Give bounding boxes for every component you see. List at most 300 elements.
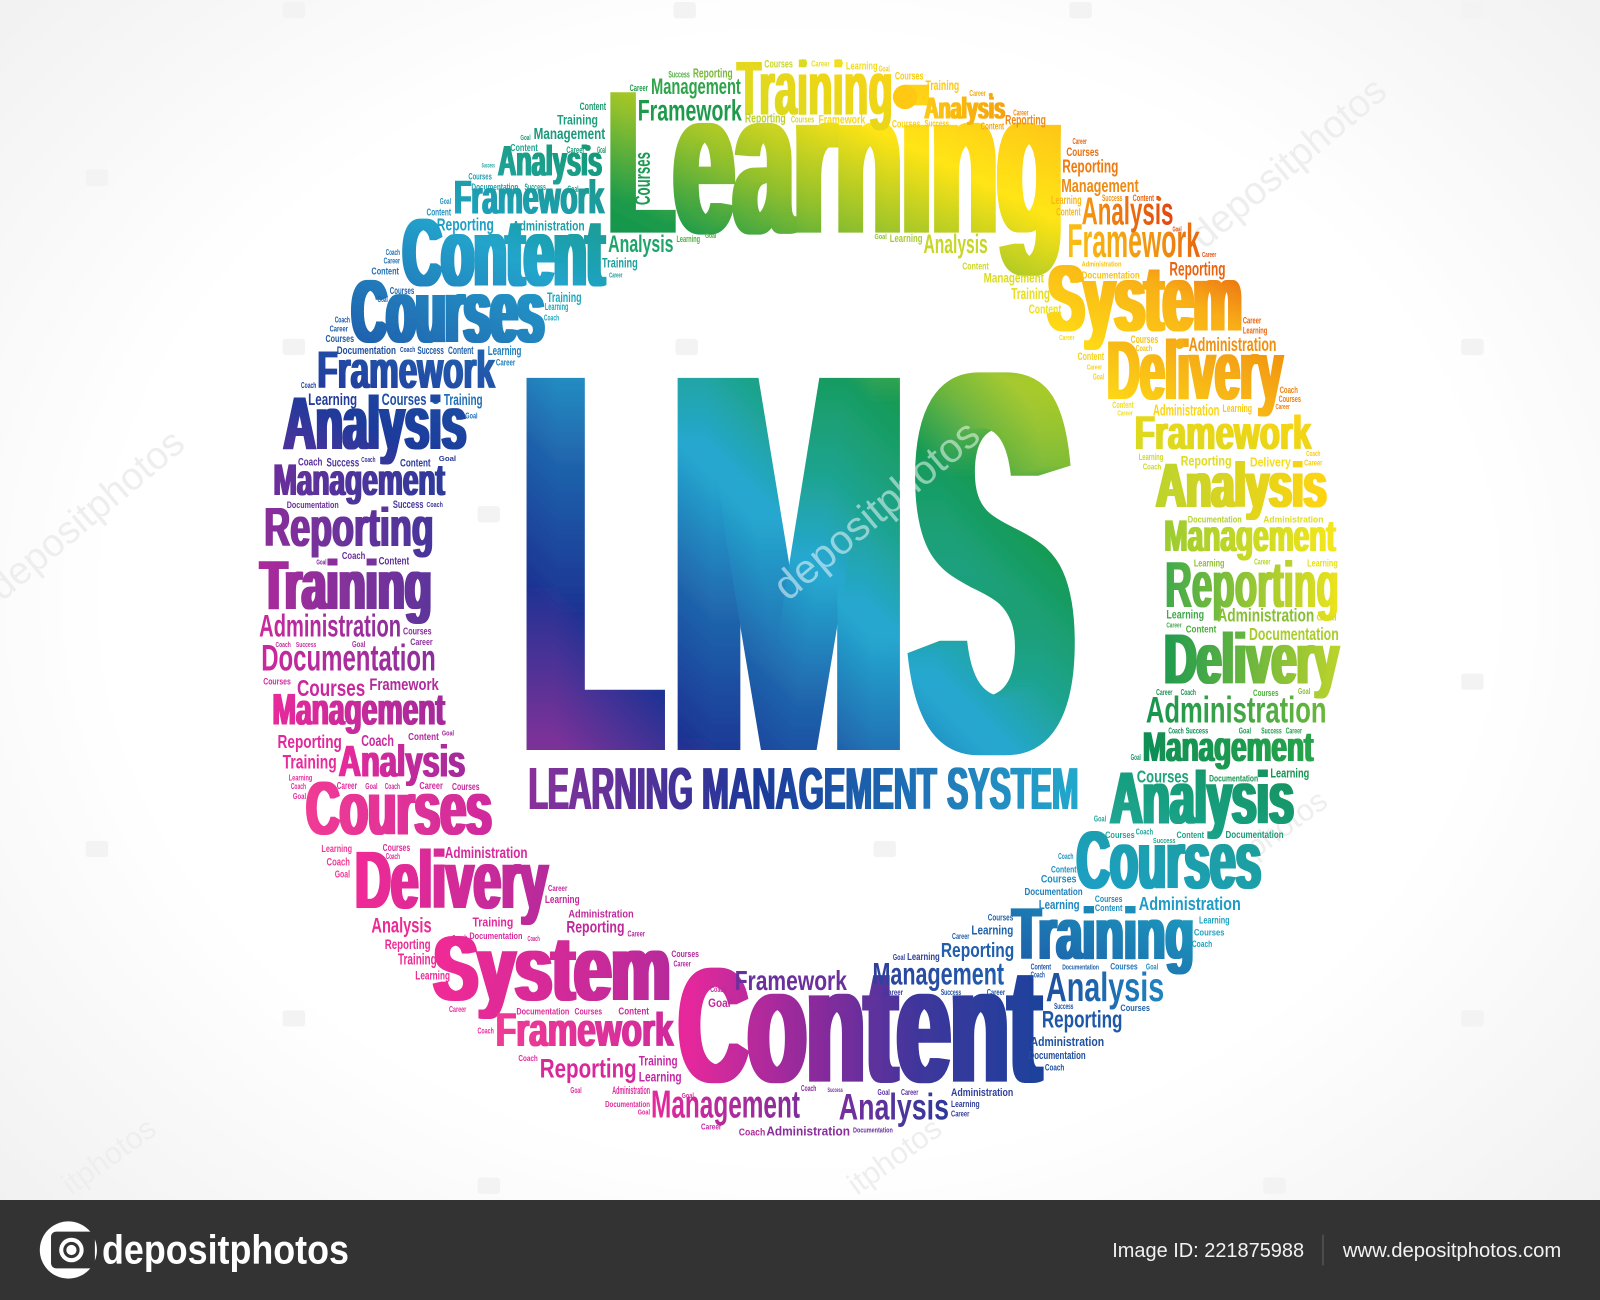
small words: right arc: Documentation bbox=[1209, 774, 1258, 784]
small words: left and lower left arc: Documentation bbox=[516, 1006, 570, 1016]
small words: right arc: Goal bbox=[1316, 612, 1337, 622]
small words: right arc: Management bbox=[1061, 175, 1139, 196]
small words: upper left arc: Goal bbox=[520, 134, 531, 142]
logo wordmark: depositphotos bbox=[102, 1226, 349, 1272]
small words: right arc: Administration bbox=[1139, 893, 1241, 914]
small words: right arc: Success bbox=[1153, 837, 1176, 845]
small words: left and lower left arc: Courses bbox=[403, 627, 432, 638]
small words: bottom arc: Success bbox=[828, 1087, 843, 1094]
small words: right arc: Documentation bbox=[1024, 887, 1083, 898]
small words: bottom arc: Goal bbox=[682, 1092, 694, 1100]
word: Analysis bottom: Analysis bbox=[839, 1086, 949, 1127]
small words: upper left arc: Career bbox=[330, 325, 349, 334]
small words: upper left arc: Training bbox=[557, 112, 598, 128]
small words: right arc: Career bbox=[1254, 557, 1271, 566]
center watermark: depositphotos bbox=[764, 410, 988, 609]
small words: left and lower left arc: Reporting bbox=[385, 937, 431, 953]
small words: top arc: Career bbox=[630, 83, 648, 93]
small words: right arc: Documentation bbox=[1082, 271, 1140, 282]
small words: left and lower left arc: Learning bbox=[639, 1070, 682, 1086]
word: Analysis right lower: Analysis bbox=[1110, 756, 1294, 839]
small words: left and lower left arc: Coach bbox=[386, 852, 400, 861]
word: Analysis upper right: Analysis bbox=[1082, 190, 1173, 233]
small words: bottom arc: Career bbox=[987, 988, 1006, 997]
small words: top arc: Goal bbox=[879, 64, 890, 73]
small words: upper left arc: Coach bbox=[544, 313, 559, 322]
small words: upper left arc: Goal bbox=[705, 232, 716, 240]
small words: bottom arc: Career bbox=[952, 932, 970, 941]
word: Training top: Training bbox=[737, 46, 893, 131]
small words: left and lower left arc: Goal bbox=[316, 558, 327, 566]
word: Documentation left: Documentation bbox=[261, 637, 436, 678]
small words: top arc bbox=[630, 58, 1046, 133]
small words: right arc: Learning bbox=[1051, 193, 1082, 207]
small words: bottom arc: Career bbox=[701, 1123, 722, 1132]
small words: right arc: Analysis bbox=[923, 229, 988, 259]
small words: top arc: Career bbox=[969, 89, 986, 98]
small words: upper left arc: Coach bbox=[386, 248, 400, 257]
small words: bottom arc: Coach bbox=[710, 985, 727, 994]
small words: right arc: Coach bbox=[1136, 344, 1152, 353]
small words: right arc: Learning bbox=[1199, 915, 1230, 926]
small words: upper left arc: Success bbox=[482, 162, 495, 169]
small words: upper left arc: Career bbox=[496, 357, 516, 367]
small words: right arc: Learning bbox=[1243, 326, 1267, 336]
word: Content bottom: Content bbox=[679, 934, 1041, 1117]
small words: bottom arc: Career bbox=[951, 1109, 970, 1118]
small words: left and lower left arc: Courses bbox=[263, 677, 291, 687]
small words: left and lower left arc: Coach bbox=[361, 733, 394, 750]
small words: right arc: Content bbox=[1051, 864, 1077, 874]
word: Analysis upper left: Analysis bbox=[498, 138, 602, 186]
small words: left and lower left arc: Career bbox=[337, 781, 357, 792]
small words: right arc: Content bbox=[1133, 193, 1154, 203]
small words: right arc: Coach bbox=[1181, 688, 1196, 697]
small words: right arc: Success bbox=[1261, 727, 1282, 736]
text: S bbox=[914, 260, 1070, 865]
word: Content upper left: Content bbox=[403, 200, 604, 307]
word: Delivery right lower: Delivery bbox=[1164, 620, 1339, 700]
website url: www.depositphotos.com bbox=[1342, 1240, 1561, 1262]
small words: upper left arc: Coach bbox=[400, 346, 415, 354]
small words: left and lower left arc: Coach bbox=[291, 782, 306, 791]
small words: bottom arc: Documentation bbox=[853, 1127, 893, 1135]
small words: right arc: Learning bbox=[1222, 403, 1252, 415]
small words: left and lower left arc: Analysis bbox=[371, 914, 432, 938]
word: Analysis lower left: Analysis bbox=[339, 736, 465, 787]
small words: upper left arc: Documentation bbox=[471, 182, 519, 192]
small words: left and lower left arc: Goal bbox=[365, 782, 378, 791]
word: System upper right: System bbox=[1048, 246, 1242, 351]
small words: left and lower left arc: Training bbox=[472, 915, 513, 930]
small words: right arc: Learning bbox=[890, 233, 923, 245]
small words: right arc: Career bbox=[1156, 688, 1173, 697]
small words: upper left arc: Coach bbox=[335, 315, 350, 324]
small words: right arc: Career bbox=[1166, 622, 1182, 630]
small words: top arc: Courses bbox=[892, 119, 920, 131]
small words: left and lower left arc: Goal bbox=[335, 870, 350, 881]
subtitle: Learning Management System bbox=[529, 755, 1079, 822]
small words: right arc: Courses bbox=[1095, 894, 1122, 904]
logo icon: camera bbox=[40, 1221, 97, 1279]
small words: upper left arc: Career bbox=[384, 256, 401, 265]
small words: left and lower left arc: Coach bbox=[528, 935, 540, 943]
small words: bottom arc: Courses bbox=[1120, 1003, 1150, 1013]
small words: left and lower left arc: Content bbox=[618, 1006, 649, 1017]
word cloud ring bbox=[259, 46, 1339, 1139]
small words: bottom arc: Reporting bbox=[941, 940, 1014, 962]
word: Courses lower left: Courses bbox=[306, 768, 492, 852]
small words: left and lower left arc: Content bbox=[400, 457, 431, 469]
small words: bottom arc: Goal bbox=[638, 1108, 650, 1116]
small words: right arc: Administration bbox=[1263, 514, 1324, 524]
small words: top arc: Reporting bbox=[745, 110, 786, 125]
word: Analysis lower right: Analysis bbox=[1046, 964, 1164, 1010]
small words: left and lower left arc: Career bbox=[628, 930, 645, 939]
small words: right arc: Learning bbox=[1039, 897, 1080, 912]
small words: top arc: Courses bbox=[764, 58, 793, 70]
small words: left and lower left arc: Documentation bbox=[287, 500, 339, 510]
small words: left and lower left arc: Coach bbox=[276, 641, 291, 649]
small words: bottom arc: Coach bbox=[739, 1128, 765, 1139]
small words: bottom arc: Goal bbox=[570, 1086, 582, 1095]
small words: upper left arc: Goal bbox=[440, 197, 451, 206]
small words: right arc: Goal bbox=[1172, 226, 1182, 234]
small words: right arc: Administration bbox=[1217, 604, 1314, 625]
small words: upper left arc: Analysis bbox=[608, 231, 673, 258]
small words: right arc: Courses bbox=[1041, 874, 1077, 886]
small words: right arc: Content bbox=[1029, 301, 1062, 316]
small words: right arc: Content bbox=[1186, 625, 1217, 636]
small words: bottom arc: Coach bbox=[801, 1084, 816, 1093]
small words: upper left arc: Courses bbox=[390, 286, 414, 297]
image id: Image ID: 221875988 bbox=[1112, 1240, 1304, 1262]
small words: right arc: Career bbox=[1202, 251, 1216, 259]
word: Management left: Management bbox=[273, 454, 445, 505]
small words: left and lower left arc: Courses bbox=[671, 949, 699, 959]
word: Management right: Management bbox=[1164, 510, 1336, 561]
small words: right arc: Career bbox=[1276, 403, 1290, 411]
small words: right arc bbox=[874, 137, 1339, 949]
small words: left and lower left arc: Courses bbox=[297, 675, 365, 701]
small words: upper left arc bbox=[301, 101, 716, 420]
small words: right arc: Goal bbox=[1094, 814, 1106, 823]
small words: right arc: Content bbox=[962, 261, 989, 272]
small words: bottom arc: Goal bbox=[878, 1088, 890, 1097]
small words: upper left arc: Administration bbox=[512, 219, 585, 235]
watermarks: itphotos bbox=[841, 1111, 948, 1202]
small words: right arc: Coach bbox=[1168, 727, 1184, 736]
small words: right arc: Goal bbox=[1131, 753, 1141, 762]
central LMS wordmark bbox=[526, 260, 1070, 865]
small words: left and lower left arc: Courses bbox=[383, 843, 410, 854]
central LMS wordmark: L bbox=[526, 260, 658, 865]
small words: right arc: Coach bbox=[1192, 939, 1213, 949]
small words: right arc: Career bbox=[1087, 363, 1102, 371]
small words: left and lower left arc: Success bbox=[327, 455, 359, 469]
small words: right arc: Documentation bbox=[1226, 830, 1284, 841]
small words: upper left arc: Learning bbox=[308, 391, 357, 409]
small words: right arc: Content bbox=[1112, 400, 1134, 410]
footer bar bbox=[0, 1200, 1600, 1300]
small words: left and lower left arc: Coach bbox=[478, 1027, 494, 1036]
small words: bottom arc: Goal bbox=[893, 953, 905, 962]
word: Analysis left: Analysis bbox=[284, 382, 466, 466]
small words: top arc: Framework bbox=[818, 112, 865, 126]
small words: top arc: Career bbox=[811, 59, 830, 68]
small words: upper left arc: Goal bbox=[465, 411, 478, 420]
small words: left and lower left arc: Success bbox=[393, 499, 423, 511]
small words: left and lower left arc: Coach bbox=[452, 934, 467, 942]
word: Delivery right: Delivery bbox=[1107, 323, 1283, 417]
word: Courses right lower: Courses bbox=[1077, 815, 1261, 906]
small words: left and lower left arc: Coach bbox=[361, 456, 376, 464]
small words: upper left arc: Content bbox=[448, 345, 474, 357]
word: Framework upper right: Framework bbox=[1067, 215, 1200, 267]
small words: upper left arc: Courses bbox=[326, 334, 354, 345]
word: Framework bottom left: Framework bbox=[496, 1004, 674, 1056]
small words: right arc: Goal bbox=[1239, 727, 1251, 736]
word: Delivery lower left: Delivery bbox=[355, 835, 548, 926]
small words: bottom arc: Courses bbox=[988, 912, 1013, 922]
small words: right arc: Content bbox=[1056, 206, 1081, 218]
small words: bottom arc: Career bbox=[884, 988, 904, 997]
small words: right arc: Learning bbox=[1307, 558, 1338, 569]
small words: bottom arc: Learning bbox=[971, 923, 1013, 938]
small words: bottom arc: Coach bbox=[1045, 1062, 1065, 1072]
letter M: M bbox=[672, 260, 905, 865]
small words: bottom arc: Goal bbox=[1146, 962, 1158, 971]
small words: right arc: Learning bbox=[1270, 766, 1309, 781]
small words: upper left arc: Learning bbox=[677, 234, 700, 244]
small words: right arc: Courses bbox=[1066, 145, 1099, 159]
small words: right arc: Courses bbox=[1279, 394, 1301, 404]
small words: right arc: Courses bbox=[1137, 767, 1189, 787]
small words: right arc: Courses bbox=[1131, 334, 1158, 346]
small words: upper left arc: Training bbox=[444, 392, 483, 409]
small words: left and lower left arc: Goal bbox=[352, 640, 365, 649]
small words: left and lower left arc: Success bbox=[296, 641, 316, 649]
small words: upper left arc: Training bbox=[547, 290, 582, 306]
small words: right arc: Success bbox=[1102, 193, 1122, 203]
word: Training lower right: Training bbox=[1012, 892, 1194, 975]
word: Learning: Learning bbox=[608, 49, 1063, 277]
small words: bottom arc: Documentation bbox=[1062, 963, 1099, 971]
small words: left and lower left arc: Content bbox=[408, 732, 439, 743]
small words: left and lower left arc: Courses bbox=[574, 1006, 602, 1016]
watermarks: photos bbox=[1239, 783, 1334, 865]
small words: upper left arc: Content bbox=[427, 207, 451, 218]
small words: upper left arc: Goal bbox=[597, 145, 606, 155]
small words: right arc: Goal bbox=[1298, 687, 1310, 696]
small words: bottom arc: Administration bbox=[612, 1085, 650, 1097]
small words: left and lower left arc: Learning bbox=[321, 844, 352, 855]
word: Framework left: Framework bbox=[317, 341, 495, 400]
small words: bottom arc: Documentation bbox=[605, 1100, 650, 1109]
small words: upper left arc: Courses bbox=[468, 172, 492, 182]
small words: right arc: Management bbox=[984, 271, 1044, 287]
small words: top arc: Learning bbox=[846, 60, 878, 72]
small words: right arc: Coach bbox=[1136, 828, 1153, 837]
small words: right arc: Success bbox=[1186, 727, 1208, 736]
small words: top arc: Career bbox=[1013, 108, 1029, 117]
small words: upper left arc: Learning bbox=[488, 343, 521, 358]
small words: right arc: Courses bbox=[1253, 688, 1279, 698]
small words: left and lower left arc: Coach bbox=[298, 456, 323, 468]
word: Reporting right: Reporting bbox=[1165, 548, 1339, 621]
small words: right arc: Reporting bbox=[1181, 453, 1232, 469]
small words: right arc: Career bbox=[1243, 315, 1261, 325]
small words: bottom arc: Administration bbox=[1031, 1034, 1104, 1049]
watermarks: depositphotos bbox=[1182, 69, 1395, 257]
small words: upper left arc: Content bbox=[371, 266, 399, 277]
small words: top arc: Training bbox=[926, 78, 959, 94]
small words: bottom arc: Administration bbox=[766, 1124, 850, 1139]
small words: right arc: Career bbox=[1304, 458, 1323, 467]
small words: left and lower left arc: Reporting bbox=[540, 1054, 637, 1084]
small words: left and lower left arc: Coach bbox=[385, 782, 400, 791]
small words: right arc: Career bbox=[1059, 334, 1075, 342]
small words: right arc: Goal bbox=[1093, 373, 1104, 382]
small words: right arc: Coach bbox=[1058, 852, 1073, 861]
small words: right arc: Reporting bbox=[1062, 155, 1118, 176]
subtitle: Learning Management System: SYSTEM bbox=[947, 755, 1079, 822]
small words: upper left arc: Career bbox=[609, 272, 623, 280]
small words: right arc: Courses bbox=[1194, 928, 1224, 938]
watermarks: itphotos bbox=[56, 1111, 162, 1202]
small words: upper left arc: Goal bbox=[378, 295, 388, 304]
small words: bottom arc: Learning bbox=[951, 1099, 980, 1109]
word: Courses vertical: Courses bbox=[630, 152, 655, 205]
word: Courses upper left: Courses bbox=[352, 262, 544, 361]
small words: upper left arc: Learning bbox=[545, 302, 568, 313]
word: Analysis right: Analysis bbox=[1156, 451, 1327, 521]
word: Reporting left: Reporting bbox=[264, 496, 434, 558]
small words: left and lower left arc: Documentation bbox=[469, 931, 523, 941]
small words: bottom arc: Career bbox=[901, 1088, 919, 1097]
small words: upper left arc: Success bbox=[417, 345, 444, 357]
small words: bottom arc: Coach bbox=[1031, 971, 1045, 980]
small words: upper left arc: Reporting bbox=[437, 215, 494, 235]
small words: bottom arc: Content bbox=[1031, 962, 1051, 971]
small words: left and lower left arc: Training bbox=[639, 1053, 678, 1069]
small words: right arc: Administration bbox=[1189, 334, 1277, 356]
small words: left and lower left arc: Career bbox=[673, 959, 691, 968]
small words: top arc: Courses bbox=[791, 114, 814, 124]
small words: left and lower left arc: Coach bbox=[327, 856, 350, 868]
word: Reporting lower right: Reporting bbox=[1042, 1007, 1122, 1034]
small words: bottom arc: Goal bbox=[708, 996, 731, 1010]
small words: left and lower left arc: Training bbox=[398, 951, 437, 968]
small words: top arc: Courses bbox=[895, 71, 923, 83]
small words: right arc: Content bbox=[1095, 903, 1122, 913]
small words: right arc: Career bbox=[1117, 409, 1133, 417]
small words: right arc: Content bbox=[1177, 830, 1204, 840]
word: Administration left: Administration bbox=[259, 608, 401, 644]
small words: left and lower left arc: Training bbox=[283, 751, 337, 773]
small words: left and lower left arc: Courses bbox=[452, 782, 480, 793]
word: Administration right: Administration bbox=[1146, 689, 1327, 730]
small words: left and lower left arc: Coach bbox=[342, 551, 365, 562]
small words: right arc: Coach bbox=[1280, 385, 1298, 395]
small words: upper left arc: Goal bbox=[567, 184, 579, 194]
small words: right arc: Coach bbox=[1306, 450, 1320, 458]
word: Analysis top right: Analysis bbox=[924, 91, 1005, 125]
small words: upper left arc: Courses bbox=[382, 391, 427, 409]
small words: upper left arc: Content bbox=[580, 101, 606, 113]
small words: upper left arc: Success bbox=[524, 182, 546, 192]
small words: top arc: Success bbox=[924, 119, 949, 129]
small words: left and lower left arc: Reporting bbox=[566, 919, 624, 937]
small words: right arc: Courses bbox=[1105, 830, 1135, 840]
word: Framework top: Framework bbox=[638, 94, 742, 127]
small words: left and lower left arc: Goal bbox=[439, 455, 456, 463]
small words: right arc: Learning bbox=[1194, 558, 1224, 569]
small words: left and lower left arc: Administration bbox=[445, 845, 528, 862]
small words: top arc: Success bbox=[668, 70, 690, 80]
small words: left and lower left arc: Coach bbox=[427, 501, 443, 509]
small words: upper left arc: Training bbox=[602, 255, 638, 271]
word: Management lower left: Management bbox=[272, 683, 445, 734]
small words: left and lower left arc: Content bbox=[379, 555, 409, 567]
small words: left and lower left arc: Framework bbox=[369, 676, 440, 694]
small words: right arc: Content bbox=[1078, 351, 1104, 363]
small words: left and lower left arc: Goal bbox=[293, 792, 306, 801]
word: Training left: Training bbox=[260, 546, 432, 624]
small words: right arc: Delivery bbox=[1250, 454, 1291, 469]
small words: upper left arc: Content bbox=[510, 143, 538, 154]
small words: right arc: Coach bbox=[1143, 462, 1161, 471]
word: System bottom left: System bbox=[434, 918, 670, 1020]
word: Framework right: Framework bbox=[1135, 407, 1312, 459]
small words: right arc: Training bbox=[1011, 286, 1050, 303]
small words: bottom arc: Learning bbox=[907, 952, 940, 963]
small words: right arc: Administration bbox=[1153, 402, 1219, 419]
word: Framework upper left: Framework bbox=[454, 171, 605, 223]
word: Management bottom: Management bbox=[651, 1083, 800, 1126]
small words: top arc: Content bbox=[981, 122, 1004, 133]
small words: bottom arc: Administration bbox=[951, 1087, 1013, 1099]
small words: right arc: Career bbox=[1286, 727, 1303, 736]
small words: right arc: Documentation bbox=[1188, 514, 1242, 524]
small words: right arc: Goal bbox=[874, 233, 887, 241]
small words: bottom arc: Documentation bbox=[1029, 1050, 1086, 1062]
small words: left and lower left arc bbox=[263, 455, 699, 1086]
small words: left and lower left arc: Career bbox=[410, 637, 433, 647]
small words: left and lower left arc: Coach bbox=[518, 1054, 538, 1063]
small words: bottom arc bbox=[570, 912, 1158, 1139]
word: Management lower right: Management bbox=[1143, 723, 1313, 770]
small words: right arc: Documentation bbox=[1249, 624, 1339, 644]
small words: left and lower left arc: Learning bbox=[545, 894, 580, 906]
word: Management lower right: Management bbox=[872, 956, 1004, 992]
small words: right arc: Reporting bbox=[1169, 259, 1226, 281]
small words: left and lower left arc: Career bbox=[449, 1005, 467, 1014]
small words: left and lower left arc: Career bbox=[548, 884, 568, 893]
small words: bottom arc: Success bbox=[1054, 1002, 1074, 1011]
subtitle: Learning Management System: LEARNING bbox=[529, 755, 693, 822]
small words: bottom arc: Success bbox=[941, 988, 962, 997]
small words: top arc: Management bbox=[651, 74, 741, 99]
small words: bottom arc: Courses bbox=[1110, 961, 1138, 971]
small words: left and lower left arc: Career bbox=[419, 781, 443, 792]
small words: right arc: Administration bbox=[1082, 260, 1121, 268]
small words: upper left arc: Coach bbox=[301, 381, 316, 390]
small words: left and lower left arc: Reporting bbox=[278, 731, 342, 752]
small words: left and lower left arc: Learning bbox=[289, 774, 312, 783]
small words: top arc: Reporting bbox=[1005, 112, 1046, 128]
small words: top arc: Reporting bbox=[693, 66, 733, 81]
